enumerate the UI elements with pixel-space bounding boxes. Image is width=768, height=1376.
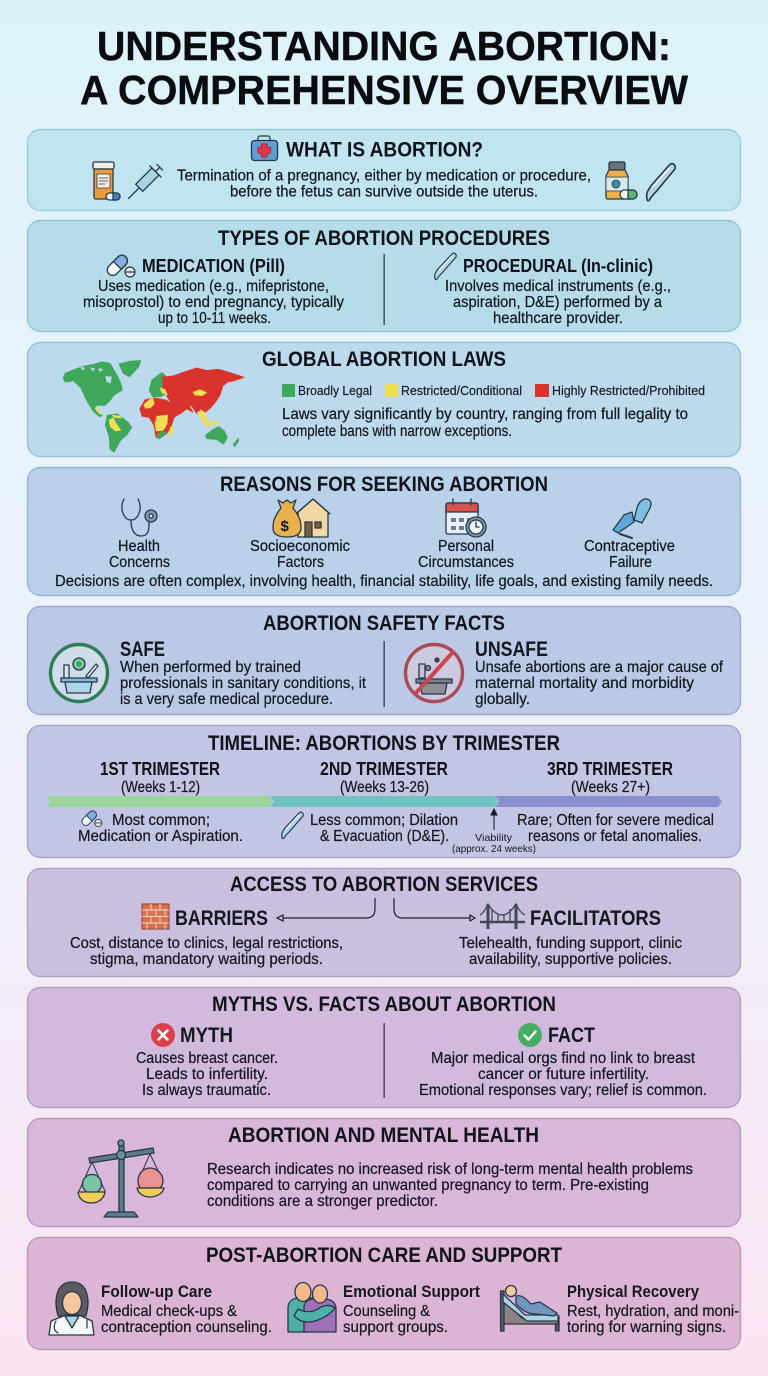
heading: ACCESS TO ABORTION SERVICES: [230, 873, 538, 896]
icon: instrument: [435, 253, 456, 280]
text: follow-up care: Medical check-ups &: [101, 1303, 238, 1320]
arrow: to barriers: [277, 898, 375, 921]
legend: Broadly Legal: [298, 383, 372, 398]
body text: Termination of a pregnancy, either by medication or procedure,: [177, 168, 591, 184]
text: unsafe: Unsafe abortions are a major cause of: [475, 659, 724, 676]
text: physical recovery: Rest, hydration, and moni-: [567, 1303, 739, 1320]
summary text: Decisions are often complex, involving health, financial stability, life goals, and existing family needs.: [55, 573, 713, 590]
heading: POST-ABORTION CARE AND SUPPORT: [206, 1244, 562, 1267]
text: follow-up care: [101, 1282, 272, 1336]
labels: Concerns: [109, 554, 170, 571]
text: second trimester: Less common; Dilation: [310, 812, 458, 829]
heading: MYTHS VS. FACTS ABOUT ABORTION: [212, 993, 556, 1016]
text: medication: Uses medication (e.g., mifepristone,: [98, 278, 329, 295]
text: facts: Emotional responses vary; relief is common.: [419, 1082, 707, 1099]
text: second trimester: [310, 812, 458, 845]
labels: Failure: [609, 554, 652, 571]
text: medication: [83, 278, 344, 327]
text: barriers: stigma, mandatory waiting periods.: [90, 951, 323, 968]
icon: instrument: [282, 812, 303, 839]
subheading: procedural: PROCEDURAL (In-clinic): [463, 256, 653, 276]
body text: before the fetus can survive outside the uterus.: [230, 184, 538, 200]
heading: GLOBAL ABORTION LAWS: [262, 348, 506, 371]
text: physical recovery: [567, 1282, 739, 1336]
body text: Research indicates no increased risk of long-term mental health problems: [207, 1161, 693, 1178]
icon: pill bottle: [93, 162, 120, 200]
viability label: (approx. 24 weeks): [452, 843, 536, 855]
body text: conditions are a stronger predictor.: [207, 1193, 438, 1210]
legend: [282, 383, 705, 398]
barriers heading: BARRIERS: [175, 906, 268, 930]
text: safe: When performed by trained: [120, 659, 301, 676]
text: emotional support: support groups.: [343, 1319, 448, 1336]
panel: global laws: [28, 342, 740, 456]
icon: pill: [105, 253, 135, 278]
text: facts: Major medical orgs find no link to breast: [431, 1050, 696, 1067]
legend: Highly Restricted/Prohibited: [552, 383, 705, 398]
text: first trimester: [78, 812, 243, 845]
text: unsafe: maternal mortality and morbidity: [475, 675, 694, 692]
text: unsafe: [475, 638, 724, 708]
viability label: Viability: [475, 832, 513, 844]
text: second trimester: & Evacuation (D&E).: [320, 828, 449, 845]
title: A COMPREHENSIVE OVERVIEW: [80, 67, 688, 113]
arrow: viability: [491, 809, 497, 830]
labels: Factors: [277, 554, 324, 571]
fact heading: FACT: [548, 1024, 595, 1047]
heading: REASONS FOR SEEKING ABORTION: [220, 473, 548, 496]
text: facts: [419, 1050, 707, 1099]
panel: myths vs facts: [28, 988, 740, 1108]
facilitators heading: FACILITATORS: [530, 906, 661, 930]
text: medication: up to 10-11 weeks.: [158, 310, 271, 327]
text: third trimester: [517, 812, 714, 845]
myth heading: MYTH: [180, 1024, 233, 1047]
timeline bar: [47, 796, 722, 807]
text: myths: Is always traumatic.: [142, 1082, 271, 1099]
icon: syringe: [123, 162, 165, 204]
text: physical recovery: Physical Recovery: [567, 1282, 699, 1301]
text: physical recovery: toring for warning signs.: [567, 1319, 726, 1336]
arrow: to facilitators: [394, 898, 475, 921]
icon: balance scale: [78, 1140, 164, 1217]
text: unsafe: UNSAFE: [475, 638, 548, 661]
icon: physical recovery: [500, 1286, 559, 1331]
labels: Contraceptive: [584, 538, 675, 555]
labels: Socioeconomic: [250, 538, 350, 555]
icon: emotional support: [288, 1282, 336, 1332]
text: procedural: Involves medical instruments (e.g.,: [445, 278, 671, 295]
heading: TYPES OF ABORTION PROCEDURES: [218, 227, 550, 250]
text: facilitators: [459, 935, 682, 968]
icon: unsafe: [406, 644, 462, 702]
icon: myth cross: [151, 1023, 175, 1047]
text: barriers: [70, 935, 343, 968]
icon: money bag and house: [273, 499, 330, 537]
text: safe: SAFE: [120, 638, 165, 661]
text: unsafe: globally.: [475, 691, 530, 708]
icon: fact check: [518, 1023, 542, 1047]
body text: [177, 168, 591, 200]
world map: [63, 361, 244, 452]
legend: Restricted/Conditional: [401, 383, 522, 398]
heading: TIMELINE: ABORTIONS BY TRIMESTER: [208, 732, 560, 755]
text: myths: Causes breast cancer.: [136, 1050, 278, 1067]
title: UNDERSTANDING ABORTION:: [97, 23, 671, 69]
viability label: [452, 832, 536, 855]
heading: WHAT IS ABORTION?: [286, 138, 483, 162]
text: follow-up care: contraception counseling.: [101, 1319, 272, 1336]
trimester labels: 3RD TRIMESTER: [547, 759, 673, 779]
body text: complete bans with narrow exceptions.: [282, 423, 512, 440]
icon: thermometer instrument: [647, 164, 675, 201]
text: facilitators: availability, supportive policies.: [469, 951, 672, 968]
icon: stethoscope: [122, 499, 157, 536]
labels: Health: [118, 538, 160, 555]
text: first trimester: Most common;: [112, 812, 210, 829]
heading: ABORTION AND MENTAL HEALTH: [228, 1124, 539, 1147]
text: barriers: Cost, distance to clinics, legal restrictions,: [70, 935, 343, 952]
panel: types of procedures: [28, 220, 740, 332]
icon: pill: [80, 809, 102, 827]
icon: contraceptive failure: [613, 499, 651, 538]
text: third trimester: Rare; Often for severe medical: [517, 812, 714, 829]
text: third trimester: reasons or fetal anomalies.: [528, 828, 702, 845]
panel: mental health: [28, 1118, 740, 1226]
subheading: medication: MEDICATION (Pill): [142, 256, 285, 276]
icon: calendar and clock: [446, 499, 486, 537]
title: [80, 23, 688, 113]
body text: [207, 1161, 693, 1210]
text: follow-up care: Follow-up Care: [101, 1282, 212, 1301]
trimester labels: [100, 759, 673, 796]
icon: medicine bottle: [606, 162, 637, 199]
text: safe: professionals in sanitary conditions, it: [120, 675, 367, 692]
labels: Circumstances: [418, 554, 514, 571]
icon: safe: [50, 644, 108, 702]
panel: timeline: [28, 726, 740, 858]
body text: [282, 406, 688, 440]
trimester labels: (Weeks 13-26): [340, 779, 429, 796]
text: safe: is a very safe medical procedure.: [120, 691, 333, 708]
text: emotional support: [343, 1282, 480, 1336]
panel: reasons: [28, 468, 740, 596]
panel: access: [28, 868, 740, 976]
text: emotional support: Counseling &: [343, 1303, 431, 1320]
icon: first aid kit: [252, 136, 278, 160]
text: medication: misoprostol) to end pregnancy, typically: [83, 294, 344, 311]
body text: Laws vary significantly by country, ranging from full legality to: [282, 406, 688, 423]
body text: compared to carrying an unwanted pregnancy to term. Pre-existing: [207, 1177, 649, 1194]
icon: money bag and house: $: [280, 518, 290, 535]
text: procedural: healthcare provider.: [493, 310, 623, 327]
text: myths: [136, 1050, 278, 1099]
text: procedural: [445, 278, 671, 327]
icon: bridge: [480, 904, 525, 929]
text: emotional support: Emotional Support: [343, 1282, 480, 1301]
panel: what is abortion: [28, 130, 740, 210]
text: facilitators: Telehealth, funding support, clinic: [459, 935, 682, 952]
heading: ABORTION SAFETY FACTS: [263, 612, 505, 635]
trimester labels: 2ND TRIMESTER: [320, 759, 448, 779]
trimester labels: 1ST TRIMESTER: [100, 759, 220, 779]
panel: post-abortion care: [28, 1238, 740, 1350]
text: myths: Leads to infertility.: [146, 1066, 268, 1083]
icon: brick wall: [142, 904, 169, 929]
text: first trimester: Medication or Aspiration.: [78, 828, 243, 845]
labels: Personal: [438, 538, 494, 555]
trimester labels: (Weeks 1-12): [121, 779, 200, 796]
icon: doctor: [49, 1282, 94, 1335]
labels: [109, 538, 675, 571]
text: facts: cancer or future infertility.: [478, 1066, 649, 1083]
text: safe: [120, 638, 367, 708]
text: procedural: aspiration, D&E) performed by a: [453, 294, 662, 311]
trimester labels: (Weeks 27+): [571, 779, 650, 796]
panel: safety facts: [28, 606, 740, 714]
